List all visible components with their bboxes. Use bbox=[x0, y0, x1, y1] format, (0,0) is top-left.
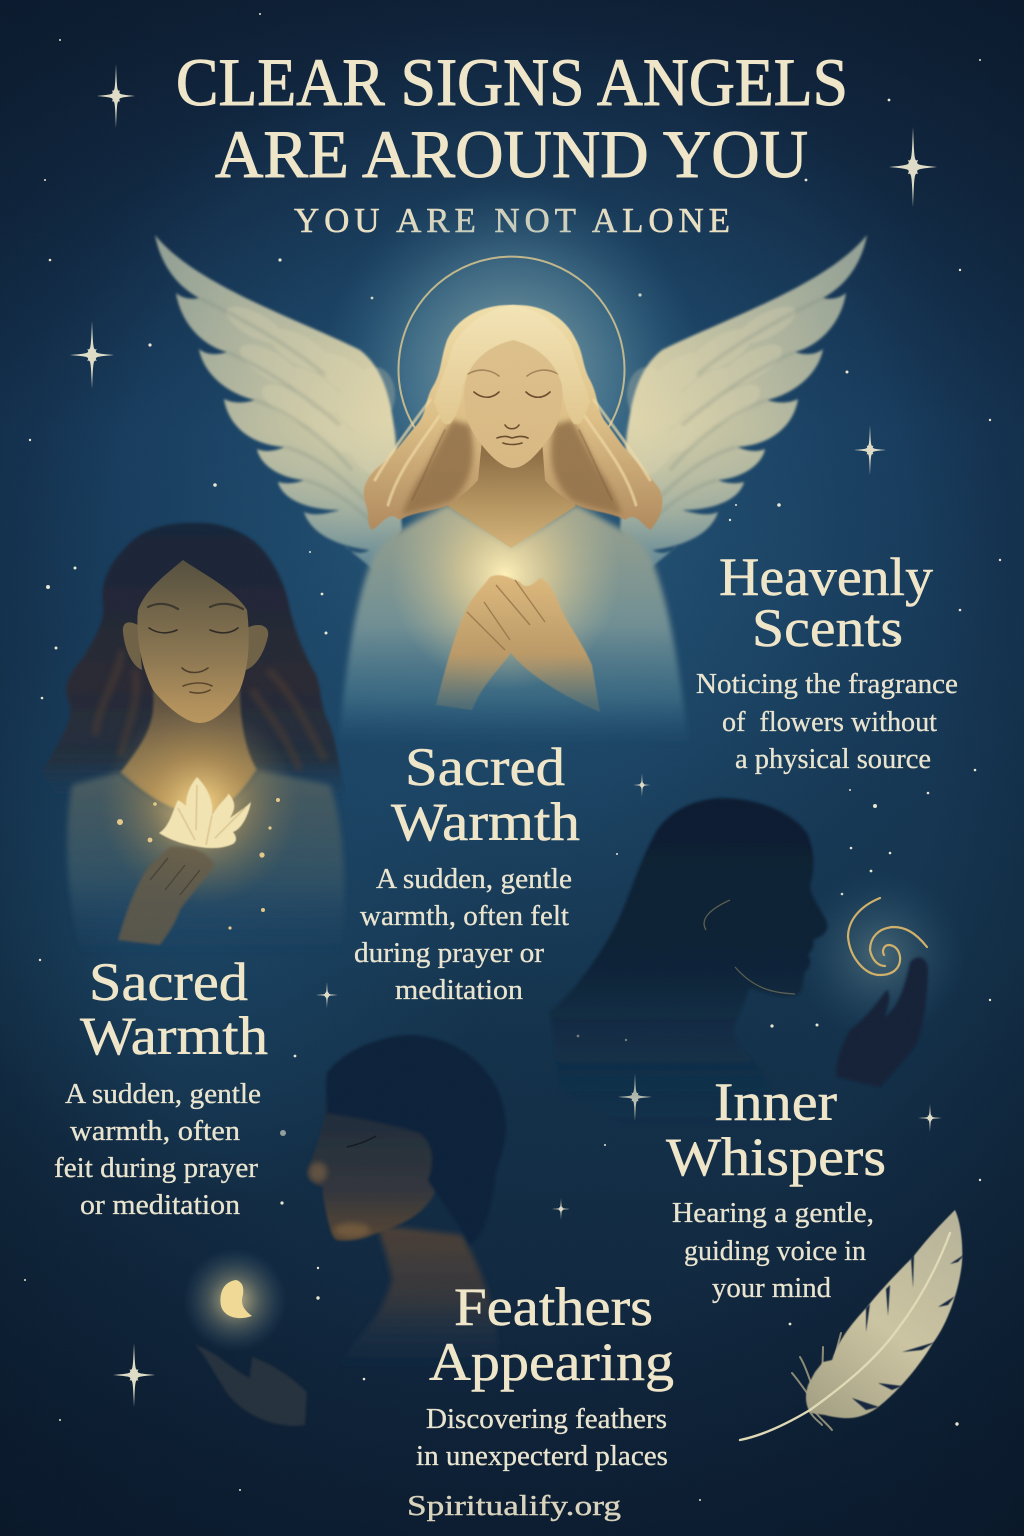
rim lights bbox=[704, 900, 795, 994]
long dark hair bbox=[42, 523, 345, 805]
description: guiding voice in bbox=[684, 1236, 866, 1267]
closed eye bbox=[347, 1136, 376, 1147]
text: Sacred Warmth centre bbox=[354, 737, 580, 1006]
face bbox=[464, 340, 562, 468]
robe bbox=[338, 505, 690, 748]
moon glow bbox=[183, 1248, 287, 1352]
open hand bbox=[195, 1345, 307, 1426]
description: in unexpecterd places bbox=[416, 1441, 668, 1472]
side-profile figure with moon bbox=[183, 1035, 506, 1426]
heading: Feathers bbox=[454, 1277, 653, 1337]
heading: Appearing bbox=[429, 1332, 674, 1392]
description: Hearing a gentle, bbox=[672, 1198, 874, 1229]
text: Inner Whispers bbox=[666, 1072, 886, 1304]
head silhouette bbox=[550, 798, 827, 1135]
finger lines bbox=[150, 858, 200, 895]
heading: Whispers bbox=[666, 1127, 886, 1187]
heading bbox=[666, 1072, 886, 1187]
feather base wisps bbox=[792, 1333, 841, 1430]
halo glow bbox=[322, 180, 702, 560]
sparkle stars bbox=[70, 64, 942, 1407]
description bbox=[416, 1404, 668, 1472]
halo ring bbox=[398, 257, 624, 430]
ears bbox=[123, 622, 268, 670]
hair bbox=[326, 1035, 506, 1245]
description: A sudden, gentle bbox=[65, 1079, 261, 1110]
facial features bbox=[468, 370, 558, 444]
face bbox=[137, 560, 249, 723]
facial features bbox=[148, 604, 243, 693]
neck bbox=[448, 440, 576, 548]
lotus flower bbox=[159, 777, 251, 848]
footer website: Spiritualify.org bbox=[407, 1490, 621, 1522]
sparkles bbox=[117, 798, 280, 930]
text: Sacred Warmth left bbox=[54, 952, 268, 1221]
text: Heavenly Scents bbox=[696, 547, 958, 775]
heading bbox=[80, 952, 268, 1066]
spiral glow bbox=[795, 870, 965, 1040]
chest glow bbox=[390, 460, 620, 690]
description: Discovering feathers bbox=[426, 1404, 667, 1435]
description: feit during prayer bbox=[54, 1153, 259, 1184]
silhouette woman with spiral bbox=[550, 798, 965, 1135]
warm light on nose and chin bbox=[309, 1162, 370, 1237]
title bbox=[176, 44, 848, 192]
heading: Heavenly bbox=[719, 547, 933, 607]
text: Feathers Appearing bbox=[416, 1277, 674, 1472]
feather vane bbox=[806, 1210, 962, 1418]
heading: Sacred bbox=[405, 737, 565, 797]
woman with lotus illustration bbox=[42, 523, 345, 955]
face bbox=[307, 1100, 440, 1241]
heading bbox=[719, 547, 933, 658]
finger lines bbox=[467, 580, 545, 650]
description: Noticing the fragrance bbox=[696, 669, 958, 700]
heading: Sacred bbox=[89, 952, 248, 1012]
feather shaft bbox=[740, 1233, 950, 1440]
heading bbox=[429, 1277, 674, 1392]
title: ARE AROUND YOU bbox=[215, 116, 808, 192]
description: a physical source bbox=[735, 744, 931, 775]
heading: Scents bbox=[752, 598, 903, 658]
feather slits bbox=[852, 1254, 965, 1410]
hair brown strands bbox=[95, 650, 325, 770]
hair wave strands bbox=[375, 400, 650, 505]
body glow bbox=[100, 705, 300, 905]
description: warmth, often bbox=[70, 1116, 240, 1147]
hand bbox=[118, 847, 215, 945]
heading: Warmth bbox=[80, 1006, 268, 1066]
subtitle: YOU ARE NOT ALONE bbox=[294, 201, 730, 240]
neck and chest bbox=[120, 690, 257, 815]
hair front bbox=[434, 305, 590, 424]
description bbox=[696, 669, 958, 775]
heading: Warmth bbox=[391, 792, 580, 852]
description: meditation bbox=[395, 975, 523, 1006]
description: of flowers without bbox=[722, 707, 937, 738]
silhouette hand bbox=[837, 957, 928, 1087]
neck and shoulders bbox=[330, 1225, 500, 1375]
description bbox=[672, 1198, 874, 1304]
description: or meditation bbox=[80, 1190, 240, 1221]
description: during prayer or bbox=[354, 938, 545, 969]
top bbox=[67, 770, 344, 955]
right wing bbox=[620, 235, 867, 575]
heading: Inner bbox=[714, 1072, 837, 1132]
golden spiral bbox=[848, 898, 927, 975]
description bbox=[354, 864, 572, 1006]
heading bbox=[391, 737, 580, 852]
feather illustration bbox=[740, 1210, 965, 1440]
left wing bbox=[155, 235, 402, 575]
description: A sudden, gentle bbox=[376, 864, 572, 895]
hands in prayer bbox=[436, 575, 600, 712]
hair shadow regions bbox=[402, 420, 622, 515]
description bbox=[54, 1079, 261, 1221]
title: CLEAR SIGNS ANGELS bbox=[176, 44, 848, 120]
description: your mind bbox=[712, 1273, 831, 1304]
description: warmth, often felt bbox=[360, 901, 569, 932]
crescent moon bbox=[220, 1280, 252, 1318]
hair mass bbox=[364, 305, 662, 530]
angel illustration bbox=[155, 180, 867, 748]
